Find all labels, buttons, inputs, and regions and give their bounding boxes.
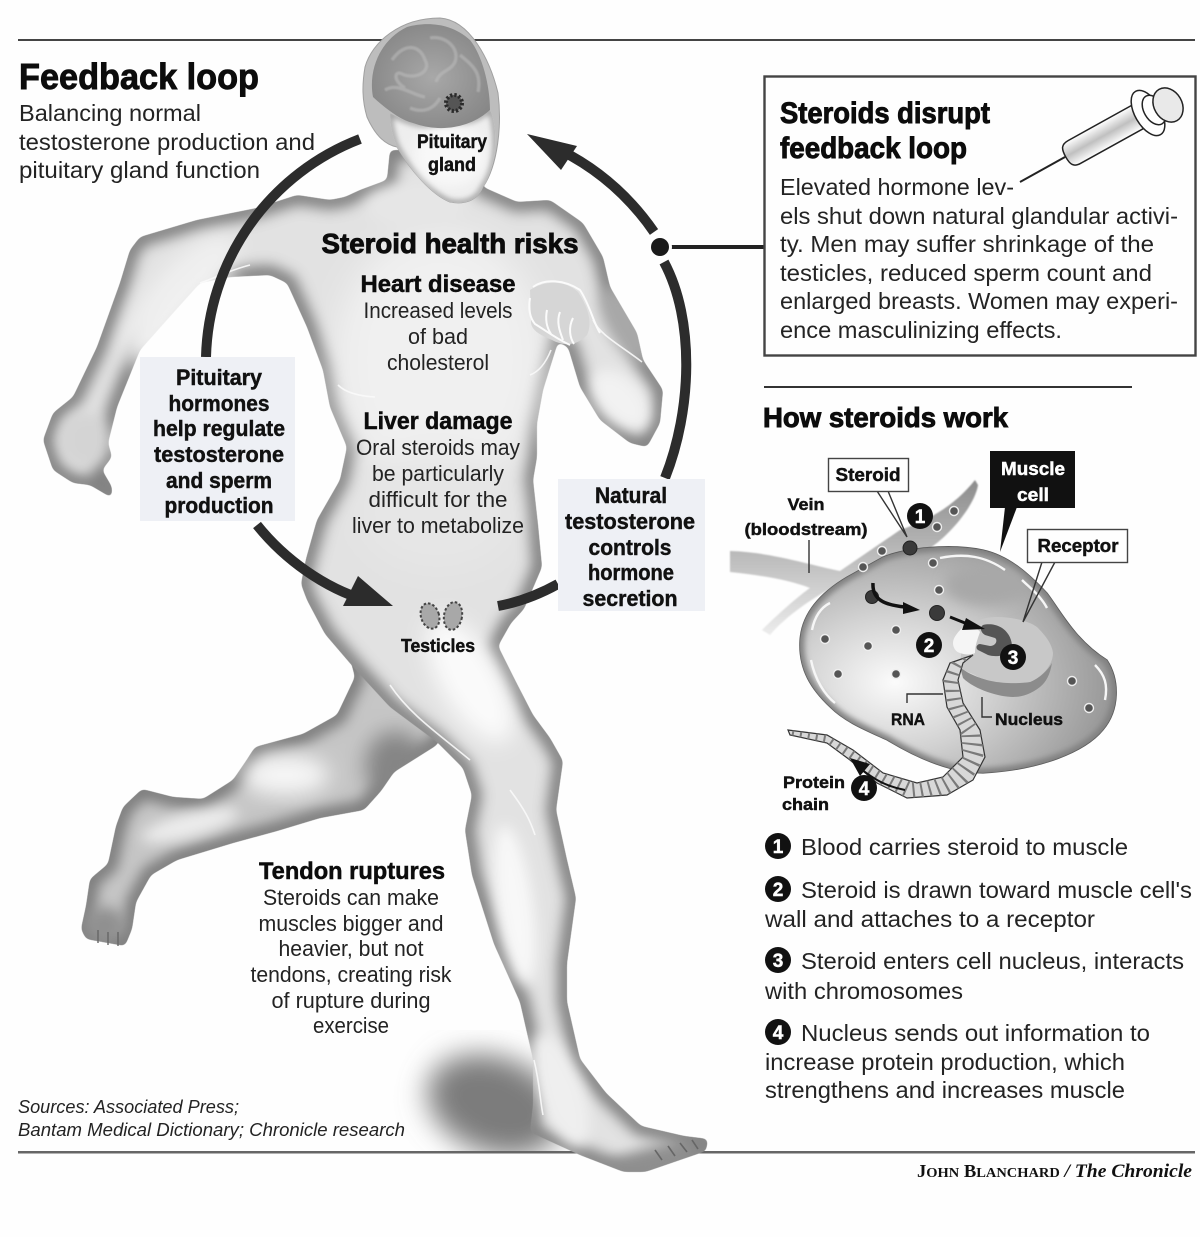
subtitle <box>19 100 315 183</box>
panel: natural testosterone: controls <box>588 535 672 560</box>
marker 1 <box>907 503 933 529</box>
heading: Steroids disrupt <box>780 97 990 130</box>
text: sources <box>18 1097 405 1140</box>
text: heart disease <box>360 271 516 375</box>
marker 1: 1 <box>915 507 926 528</box>
text: liver damage: Liver damage <box>364 408 512 435</box>
text: tendon ruptures: of rupture during <box>272 988 430 1013</box>
arrow: testicles to testosterone panel <box>498 584 558 606</box>
text: heart disease: Heart disease <box>360 271 516 298</box>
step 3: 3 <box>773 951 783 972</box>
subtitle: Balancing normal <box>19 100 201 126</box>
step 3: Steroid enters cell nucleus, interacts <box>801 948 1184 974</box>
foot shadow <box>408 1034 569 1151</box>
pituitary gland marker <box>446 95 462 111</box>
subtitle: pituitary gland function <box>19 157 260 183</box>
top rule <box>18 39 1195 41</box>
label: pituitary gland: Pituitary <box>417 132 487 153</box>
panel: natural testosterone: Natural <box>595 483 667 508</box>
label: protein chain <box>782 773 845 814</box>
panel: pituitary hormones: production <box>164 493 274 518</box>
text: tendon ruptures: heavier, but not <box>278 936 424 961</box>
protein direction arrow <box>850 758 905 790</box>
RNA and protein chain <box>788 655 985 798</box>
receptor <box>977 624 1012 656</box>
diagram: muscle cell <box>730 451 1128 814</box>
arrow: pituitary to hormones panel <box>206 139 360 357</box>
back foot toes <box>98 930 118 946</box>
fist <box>529 281 600 345</box>
text: liver damage <box>352 408 524 538</box>
step 4 <box>765 1019 1150 1103</box>
step 3: with chromosomes <box>764 978 963 1004</box>
torso, arms and front leg <box>43 150 708 1184</box>
brain <box>372 24 490 128</box>
text: tendon ruptures <box>250 858 452 1038</box>
nucleus <box>953 617 1053 697</box>
arrow: panel to testicles <box>257 525 393 606</box>
arrow: testosterone panel up to dot <box>664 262 686 478</box>
step 4: Nucleus sends out information to <box>801 1020 1150 1046</box>
subtitle: testosterone production and <box>19 129 315 155</box>
step 2 <box>764 876 1192 932</box>
heading: how steroids work: How steroids work <box>763 402 1008 433</box>
heading: steroid health risks: Steroid health risks <box>322 228 578 259</box>
muscle highlights <box>200 265 642 1115</box>
feedback arrows <box>206 134 686 606</box>
heading: feedback loop: Feedback loop <box>19 56 259 97</box>
text: heart disease: Increased levels <box>364 298 512 323</box>
bottom rule <box>18 1151 1195 1154</box>
credit: JOHN BLANCHARD / The Chronicle <box>917 1161 1193 1182</box>
text: liver damage: difficult for the <box>368 487 508 512</box>
face <box>390 110 495 203</box>
label: testicles: Testicles <box>401 636 475 656</box>
cell outline highlights <box>811 556 1106 703</box>
text: tendon ruptures: muscles bigger and <box>258 911 444 936</box>
connector dot and line <box>648 235 764 259</box>
cell body <box>800 547 1116 773</box>
label: pituitary gland: gland <box>428 155 476 176</box>
heading: feedback loop <box>19 56 315 183</box>
marker 2: 2 <box>924 636 934 657</box>
panel: pituitary hormones <box>140 357 295 521</box>
body text: els shut down natural glandular activi- <box>780 203 1178 229</box>
label: vein: (bloodstream) <box>744 520 868 539</box>
marker 3: 3 <box>1008 648 1018 669</box>
label: nucleus: Nucleus <box>995 710 1063 729</box>
text: tendon ruptures: exercise <box>313 1013 389 1038</box>
marker 4: 4 <box>859 779 870 800</box>
marker 3 <box>1000 644 1026 670</box>
label: vein <box>744 495 868 539</box>
panel: pituitary hormones: and sperm <box>166 468 272 493</box>
step 2: 2 <box>773 880 783 901</box>
rule above how steroids work <box>764 386 1132 388</box>
panel: pituitary hormones: hormones <box>168 391 270 416</box>
dots <box>820 506 1094 712</box>
marker 4 <box>851 775 877 801</box>
panel: pituitary hormones: help regulate <box>153 416 285 441</box>
text: liver damage: be particularly <box>372 461 504 486</box>
panel: pituitary hormones: testosterone <box>154 442 284 467</box>
movement arrows <box>873 583 985 630</box>
panel: natural testosterone: secretion <box>582 586 678 611</box>
body text <box>780 174 1178 343</box>
icon: syringe <box>1020 82 1189 182</box>
heading <box>780 97 990 165</box>
text: tendon ruptures: tendons, creating risk <box>250 962 452 987</box>
step 4: strengthens and increases muscle <box>765 1077 1125 1103</box>
text: heart disease: cholesterol <box>387 350 489 375</box>
panel: natural testosterone <box>558 479 705 611</box>
step 2: Steroid is drawn toward muscle cell's <box>801 877 1192 903</box>
panel: pituitary hormones: Pituitary <box>176 365 263 390</box>
label: steroid: Steroid <box>836 465 900 485</box>
label: protein chain: Protein <box>783 773 845 792</box>
label: muscle cell: Muscle <box>1001 459 1065 479</box>
text: liver damage: Oral steroids may <box>356 435 520 460</box>
label: receptor: Receptor <box>1038 536 1118 556</box>
label: receptor <box>1028 530 1128 562</box>
label: protein chain: chain <box>782 795 829 814</box>
step 1: 1 <box>773 837 784 858</box>
label: steroid <box>828 458 908 492</box>
panel: natural testosterone: testosterone <box>565 509 695 534</box>
marker 2 <box>916 632 942 658</box>
label: pituitary gland <box>417 132 487 176</box>
head and brain <box>363 18 500 203</box>
label: muscle cell <box>990 451 1075 552</box>
label: muscle cell: cell <box>1017 485 1049 505</box>
body text: enlarged breasts. Women may experi- <box>780 288 1178 314</box>
step 4: 4 <box>773 1023 784 1044</box>
step 2: wall and attaches to a receptor <box>764 906 1095 932</box>
text: tendon ruptures: Steroids can make <box>263 885 439 910</box>
front foot toes <box>655 1140 698 1160</box>
panel: natural testosterone: hormone <box>588 560 674 585</box>
back leg <box>82 665 438 946</box>
step 4: increase protein production, which <box>765 1049 1125 1075</box>
vein <box>730 480 978 635</box>
text: sources: Bantam Medical Dictionary; Chronicle research <box>18 1120 405 1140</box>
runner figure <box>43 18 708 1184</box>
body text: ty. Men may suffer shrinkage of the <box>780 231 1154 257</box>
steroid molecules <box>866 541 944 620</box>
text: liver damage: liver to metabolize <box>352 513 524 538</box>
body text: ence masculinizing effects. <box>780 317 1062 343</box>
step 3 <box>764 947 1184 1004</box>
label: vein: Vein <box>788 495 824 514</box>
text: tendon ruptures: Tendon ruptures <box>259 858 445 885</box>
panel: steroids disrupt feedback loop <box>764 76 1196 356</box>
testicles <box>417 601 464 631</box>
step 1: Blood carries steroid to muscle <box>801 834 1128 860</box>
text: sources: Sources: Associated Press; <box>18 1097 239 1117</box>
body text: Elevated hormone lev- <box>780 174 1014 200</box>
label: rna: RNA <box>891 710 925 729</box>
text: heart disease: of bad <box>408 324 468 349</box>
body text: testicles, reduced sperm count and <box>780 260 1152 286</box>
heading: feedback loop <box>780 132 967 165</box>
leaders <box>809 491 1055 717</box>
arrow: dot to pituitary <box>527 134 654 232</box>
